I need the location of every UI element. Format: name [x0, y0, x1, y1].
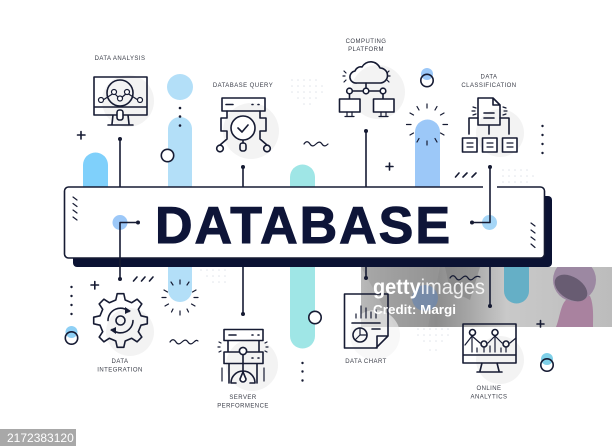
title banner	[64, 165, 552, 279]
label: data classification	[461, 74, 517, 89]
label: data classification: DATA	[481, 74, 497, 80]
decoration: dots far right	[541, 125, 544, 154]
label: server performence: PERFORMENCE	[217, 404, 269, 410]
image id tag: 2172383120	[7, 431, 74, 445]
label: online analytics	[471, 386, 507, 400]
label: data integration: INTEGRATION	[97, 368, 143, 374]
watermark text	[373, 276, 485, 317]
decoration: slashes top right	[456, 173, 476, 177]
connector: data chart	[364, 258, 368, 280]
decoration: dots under teal column	[301, 362, 304, 382]
connector: database query	[241, 165, 245, 187]
label: computing platform	[346, 39, 386, 53]
label: computing platform: COMPUTING	[346, 39, 386, 45]
decoration: ring on teal column	[309, 311, 321, 324]
decoration: slashes lower left	[134, 277, 153, 281]
connector node: data classification	[470, 165, 497, 230]
label: data analysis: DATA ANALYSIS	[95, 56, 145, 62]
connector: computing platform	[364, 129, 368, 187]
decoration: left ring with blue disc	[65, 326, 78, 344]
icon: computing platform	[340, 62, 405, 119]
watermark panel	[361, 267, 612, 327]
background pill: pale blue column	[168, 117, 192, 302]
connector: server performence	[241, 258, 245, 316]
watermark text: gettyimages	[373, 276, 485, 299]
connector node: data integration	[112, 215, 140, 279]
label: data classification: CLASSIFICATION	[461, 83, 517, 89]
wave over watermark	[450, 276, 480, 280]
connector dot: data integration	[118, 277, 122, 281]
decoration: rays around pale column bottom	[162, 280, 198, 315]
label: data integration: DATA	[112, 359, 128, 365]
decoration: ring on pale column	[161, 149, 174, 162]
decoration: plus centre	[386, 163, 393, 170]
slashes in banner right	[531, 223, 535, 248]
banner panel	[64, 187, 544, 258]
icon: online analytics	[463, 324, 524, 384]
decoration: wave top	[304, 142, 328, 146]
halftone dots: lower right	[417, 328, 449, 351]
decoration: right ring with blue disc	[541, 353, 553, 371]
icon: database query	[217, 98, 279, 159]
decoration: wave lower	[170, 340, 198, 344]
background pill: light blue left	[83, 153, 108, 187]
decoration: dots far left	[70, 286, 73, 315]
plus over watermark	[537, 320, 544, 327]
decoration: top ring with blue disc	[421, 68, 433, 87]
icon: server performence	[218, 330, 278, 391]
decoration: plus lower left	[91, 282, 98, 289]
label: data chart: DATA CHART	[345, 359, 387, 365]
label: computing platform: PLATFORM	[348, 47, 384, 53]
watermark text: Credit: Margi	[373, 302, 456, 317]
label: data integration	[97, 359, 143, 374]
connector: data analysis	[118, 137, 122, 187]
background pill: teal column	[290, 164, 315, 348]
label: database query: DATABASE QUERY	[213, 83, 273, 89]
halftone dots: right	[502, 169, 534, 183]
connector: online analytics	[488, 258, 492, 308]
label: online analytics: ONLINE	[476, 386, 502, 392]
banner shadow	[73, 196, 552, 267]
icon: data classification	[462, 98, 524, 157]
slashes in banner left	[73, 197, 77, 220]
label: server performence: SERVER	[229, 395, 257, 401]
label: online analytics: ANALYTICS	[471, 394, 507, 400]
halftone dots: lower left	[200, 269, 226, 283]
background pill: blue column	[415, 119, 440, 187]
background circle: pale blue	[167, 74, 193, 100]
decoration: dots under blue circle	[179, 107, 181, 127]
icon: data integration	[94, 294, 154, 356]
label: server performence	[217, 395, 269, 410]
title: DATABASE	[155, 197, 450, 255]
icon: data analysis	[94, 75, 154, 127]
decoration: rays around blue column	[406, 104, 448, 145]
icon: data chart	[344, 294, 400, 360]
decoration: plus top left	[78, 132, 85, 139]
halftone dots: top	[291, 79, 323, 105]
